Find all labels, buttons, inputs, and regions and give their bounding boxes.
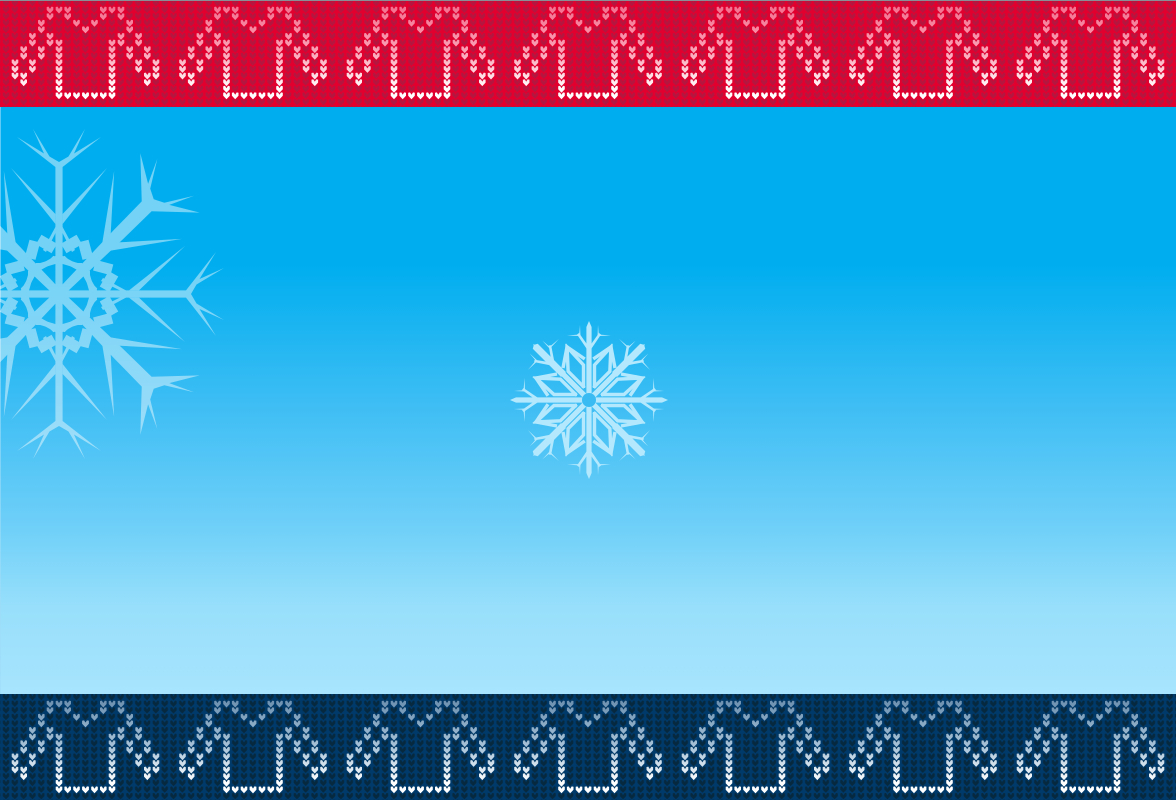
small snowflake, centre (510, 321, 668, 479)
bottom knitted band: navy with sweater motifs (0, 694, 1176, 800)
large snowflake, left edge (0, 129, 224, 459)
top knitted band: red with sweater motifs (0, 0, 1176, 107)
sky gradient background (0, 107, 1176, 694)
